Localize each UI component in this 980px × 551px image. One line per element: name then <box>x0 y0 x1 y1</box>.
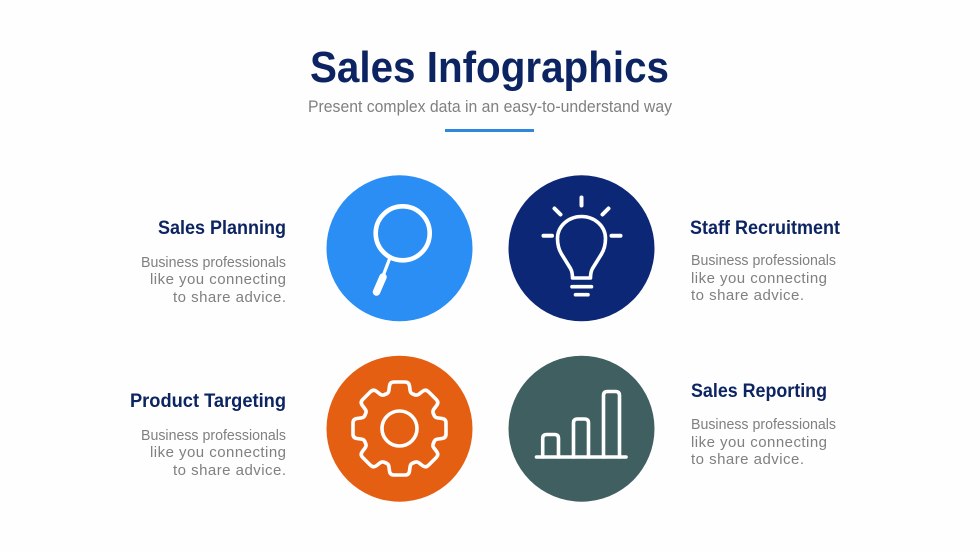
body: Sales Reporting: like you connecting <box>691 434 827 451</box>
text block: Product Targeting <box>130 390 286 479</box>
body: Sales Planning: to share advice. <box>173 289 286 306</box>
body: Product Targeting <box>141 427 286 479</box>
body: Product Targeting: Business professionals <box>141 427 286 444</box>
body: Staff Recruitment: Business professionals <box>691 252 836 269</box>
icon: lightbulb <box>544 198 620 295</box>
heading: Sales Reporting: Sales Reporting <box>691 380 827 402</box>
text block: Sales Planning <box>141 217 286 306</box>
body: Staff Recruitment: to share advice. <box>691 287 804 304</box>
body: Sales Planning: Business professionals <box>141 254 286 271</box>
circle: navy with lightbulb <box>508 175 654 321</box>
circle: teal with bar chart <box>508 356 654 502</box>
body: Staff Recruitment: like you connecting <box>691 270 827 287</box>
body: Sales Planning <box>141 254 286 306</box>
body: Staff Recruitment <box>691 252 836 304</box>
heading: Sales Planning: Sales Planning <box>158 217 286 239</box>
title underline <box>445 129 534 132</box>
body: Product Targeting: like you connecting <box>150 444 286 461</box>
body: Sales Reporting: to share advice. <box>691 451 804 468</box>
body: Sales Reporting <box>691 416 836 468</box>
heading: Product Targeting: Product Targeting <box>130 390 286 412</box>
text block: Staff Recruitment <box>690 217 840 304</box>
circle: orange with gear <box>326 356 472 502</box>
icon: bar chart <box>536 392 626 457</box>
icon: gear <box>353 382 446 475</box>
body: Sales Reporting: Business professionals <box>691 416 836 433</box>
heading: Staff Recruitment: Staff Recruitment <box>690 217 840 239</box>
circle: blue with magnifier <box>326 175 472 321</box>
body: Sales Planning: like you connecting <box>150 271 286 288</box>
title: Sales Infographics <box>310 43 669 92</box>
subtitle: Present complex data in an easy-to-understand way <box>308 98 673 116</box>
body: Product Targeting: to share advice. <box>173 462 286 479</box>
icon: magnifying glass <box>376 206 430 292</box>
text block: Sales Reporting <box>691 380 836 468</box>
